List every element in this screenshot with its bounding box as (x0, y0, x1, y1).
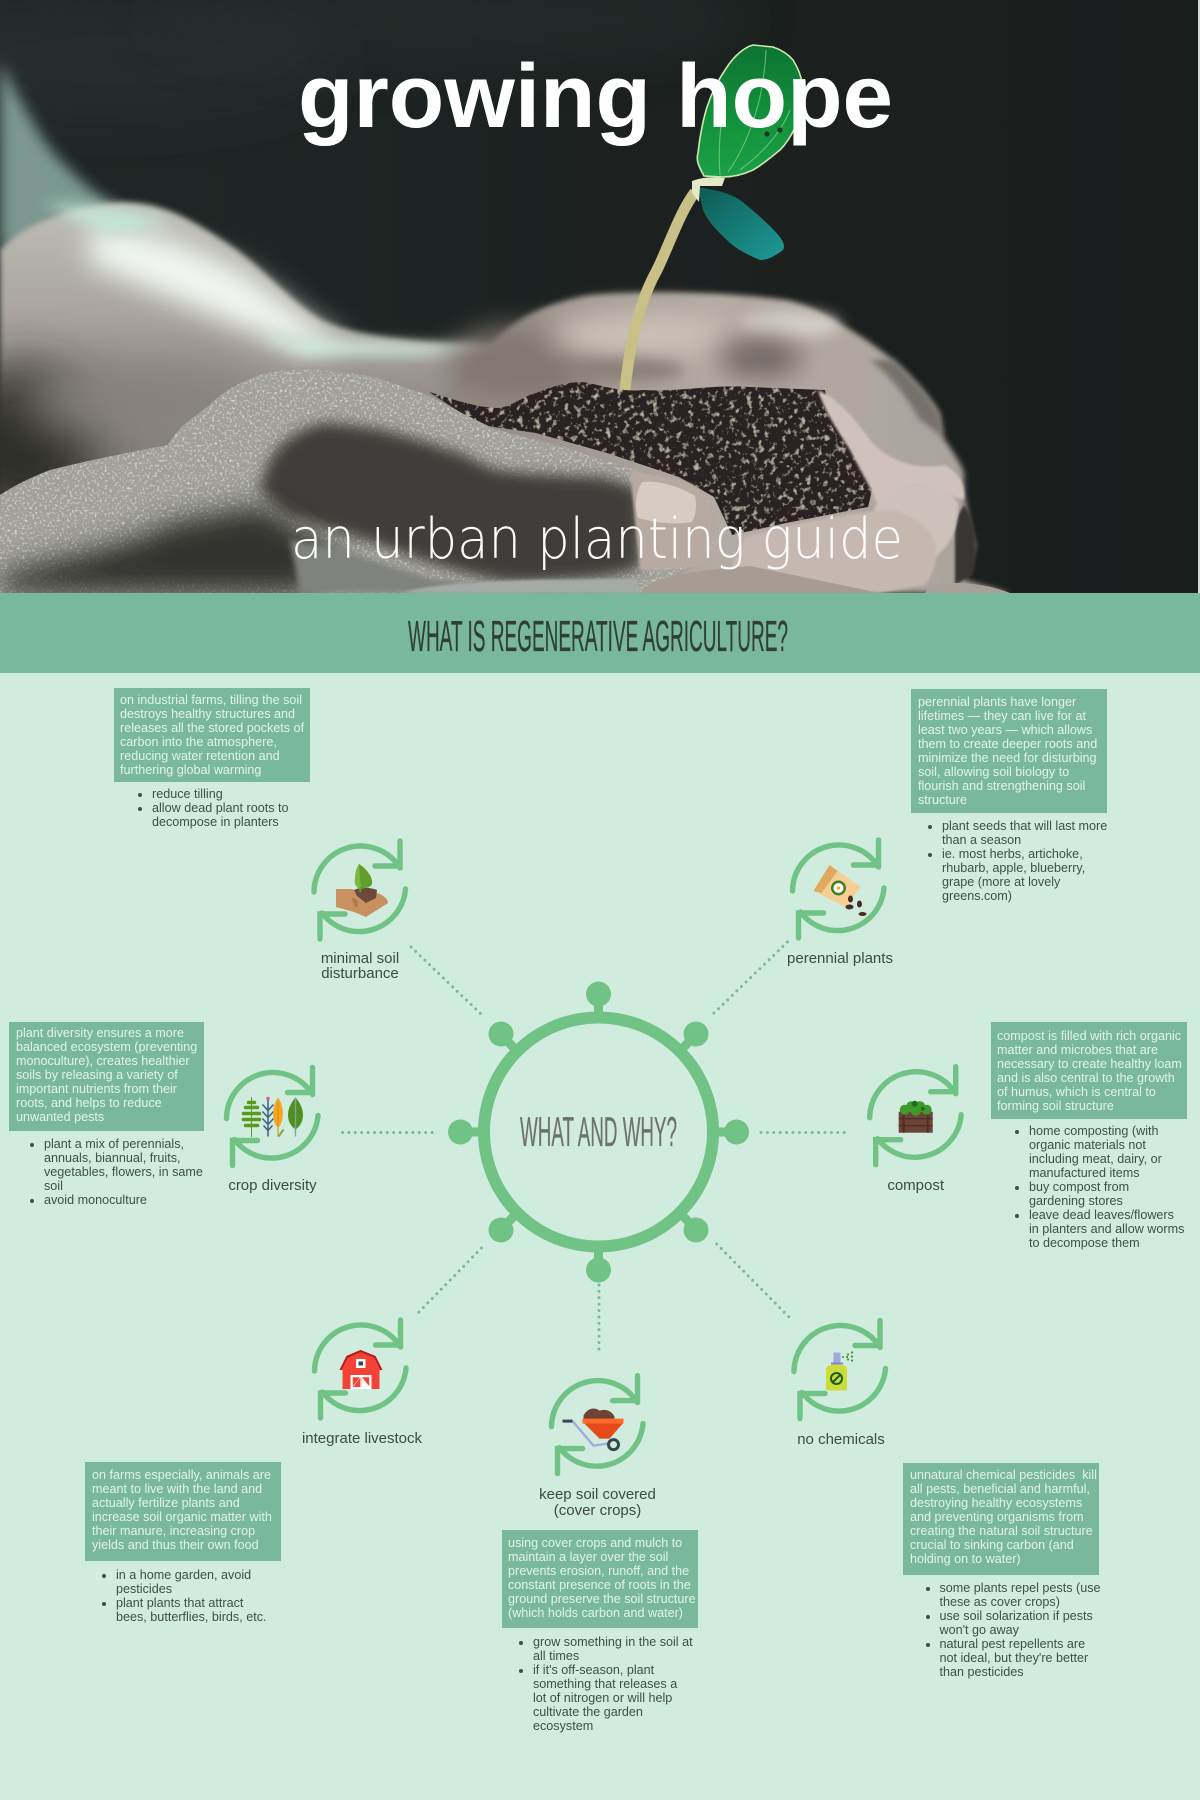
bullet list: if it's off-season, plant (533, 1663, 654, 1677)
callout (991, 1022, 1187, 1119)
bullet list: than pesticides (940, 1665, 1024, 1679)
callout: unnatural chemical pesticides kill (910, 1468, 1097, 1482)
callout: using cover crops and mulch to (508, 1536, 682, 1550)
bullet list: some plants repel pests (use (940, 1581, 1101, 1595)
callout: flourish and strengthening soil (918, 779, 1085, 793)
callout: unwanted pests (16, 1110, 104, 1124)
callout: destroys healthy structures and (120, 707, 295, 721)
bullet list: greens.com) (942, 889, 1012, 903)
callout: on industrial farms, tilling the soil (120, 693, 302, 707)
bullet list: including meat, dairy, or (1029, 1152, 1162, 1166)
callout: destroying healthy ecosystems (910, 1496, 1082, 1510)
bullet list: in planters and allow worms (1029, 1222, 1184, 1236)
node: compost (870, 1067, 961, 1194)
icon: hand holding plant (336, 864, 388, 917)
callout: matter and microbes that are (997, 1043, 1158, 1057)
callout: constant presence of roots in the (508, 1578, 691, 1592)
bullet list: grape (more at lovely (942, 875, 1060, 889)
bullet list: ie. most herbs, artichoke, (942, 847, 1083, 861)
title: growing hope (298, 47, 893, 147)
callout: of humus, which is central to (997, 1085, 1156, 1099)
bullet list: soil (44, 1179, 63, 1193)
callout: them to create deeper roots and (918, 737, 1097, 751)
dotted connectors (342, 942, 847, 1354)
panel: minimal soil disturbance text (114, 688, 310, 829)
panel: crop diversity text (9, 1022, 204, 1207)
callout: and preventing organisms from (910, 1510, 1084, 1524)
callout: holding on to water) (910, 1552, 1021, 1566)
callout (903, 1463, 1099, 1575)
label: perennial plants (787, 950, 893, 967)
callout: minimize the need for disturbing (918, 751, 1097, 765)
bullet list: lot of nitrogen or will help (533, 1691, 672, 1705)
icon: wheelbarrow (562, 1409, 624, 1450)
bullet list: vegetables, flowers, in same (44, 1165, 203, 1179)
bullet list: annuals, biannual, fruits, (44, 1151, 181, 1165)
callout: plant diversity ensures a more (16, 1026, 184, 1040)
node: keep soil covered (539, 1376, 656, 1519)
callout: important nutrients from their (16, 1082, 177, 1096)
callout: soil, allowing soil biology to (918, 765, 1069, 779)
callout: roots, and helps to reduce (16, 1096, 162, 1110)
label: no chemicals (797, 1431, 885, 1448)
callout (911, 689, 1107, 813)
icon: seed packet (814, 865, 866, 916)
bullet list: these as cover crops) (940, 1595, 1060, 1609)
callout (502, 1530, 698, 1628)
icon: red barn (340, 1350, 382, 1389)
bullet list (926, 1581, 1101, 1679)
bullet list: than a season (942, 833, 1021, 847)
callout: prevents erosion, runoff, and the (508, 1564, 689, 1578)
label: minimal soil (321, 950, 399, 967)
panel: keep soil covered text (502, 1530, 698, 1733)
hero photo: hands holding seedling (0, 0, 1200, 593)
callout: releases all the stored pockets of (120, 721, 304, 735)
bullet list: all times (533, 1649, 579, 1663)
bullet list (138, 787, 289, 829)
bullet list: plant plants that attract (116, 1596, 243, 1610)
callout: actually fertilize plants and (92, 1496, 240, 1510)
label: (cover crops) (554, 1502, 641, 1519)
callout: their manure, increasing crop (92, 1524, 255, 1538)
callout: soils by releasing a variety of (16, 1068, 178, 1082)
callout: lifetimes — they can live for at (918, 709, 1086, 723)
label: compost (887, 1177, 945, 1194)
callout: increase soil organic matter with (92, 1510, 272, 1524)
hub: what and why circle: WHAT AND WHY? (520, 1108, 677, 1155)
callout: yields and thus their own food (92, 1538, 259, 1552)
edge strip (1198, 0, 1200, 593)
bullet list (1015, 1124, 1184, 1250)
bullet list: to decompose them (1029, 1236, 1140, 1250)
bullet list: reduce tilling (152, 787, 223, 801)
callout: compost is filled with rich organic (997, 1029, 1181, 1043)
bullet list: buy compost from (1029, 1180, 1129, 1194)
node: crop diversity (226, 1068, 318, 1194)
callout: crucial to sinking carbon (and (910, 1538, 1074, 1552)
bullet list: use soil solarization if pests (940, 1609, 1093, 1623)
bullet list: leave dead leaves/flowers (1029, 1208, 1174, 1222)
callout (114, 688, 310, 782)
bullet list (102, 1568, 266, 1624)
subtitle: an urban planting guide (291, 507, 903, 572)
callout: and is also central to the growth (997, 1071, 1175, 1085)
callout: structure (918, 793, 967, 807)
heading band (0, 593, 1200, 673)
bullet list: something that releases a (533, 1677, 677, 1691)
node: integrate livestock (302, 1320, 423, 1447)
bullet list: natural pest repellents are (940, 1637, 1085, 1651)
bullet list: plant a mix of perennials, (44, 1137, 184, 1151)
callout: monoculture), creates healthier (16, 1054, 190, 1068)
bullet list: in a home garden, avoid (116, 1568, 251, 1582)
bullet list: allow dead plant roots to (152, 801, 289, 815)
node: no chemicals (794, 1320, 886, 1448)
callout: maintain a layer over the soil (508, 1550, 668, 1564)
bullet list: cultivate the garden (533, 1705, 643, 1719)
bullet list: pesticides (116, 1582, 172, 1596)
node: perennial plants (787, 840, 893, 967)
label: integrate livestock (302, 1430, 423, 1447)
callout: meant to live with the land and (92, 1482, 262, 1496)
bullet list: not ideal, but they're better (940, 1651, 1088, 1665)
bullet list (30, 1137, 203, 1207)
bullet list: home composting (with (1029, 1124, 1158, 1138)
label: disturbance (321, 965, 399, 982)
callout (9, 1022, 204, 1131)
callout: carbon into the atmosphere, (120, 735, 277, 749)
icon: four plants (244, 1097, 303, 1136)
node: minimal soil disturbance (314, 841, 406, 982)
panel: integrate livestock text (85, 1462, 281, 1624)
callout: all pests, beneficial and harmful, (910, 1482, 1090, 1496)
callout: ground preserve the soil structure (508, 1592, 696, 1606)
callout: balanced ecosystem (preventing (16, 1040, 197, 1054)
bullet list: rhubarb, apple, blueberry, (942, 861, 1085, 875)
bullet list: ecosystem (533, 1719, 593, 1733)
callout: forming soil structure (997, 1099, 1114, 1113)
callout: (which holds carbon and water) (508, 1606, 683, 1620)
bullet list: won't go away (940, 1623, 1019, 1637)
bullet list: bees, butterflies, birds, etc. (116, 1610, 266, 1624)
label: keep soil covered (539, 1486, 656, 1503)
bullet list: gardening stores (1029, 1194, 1123, 1208)
callout: furthering global warming (120, 763, 261, 777)
callout: perennial plants have longer (918, 695, 1076, 709)
label: crop diversity (228, 1177, 317, 1194)
callout: least two years — which allows (918, 723, 1092, 737)
callout: reducing water retention and (120, 749, 280, 763)
bullet list: avoid monoculture (44, 1193, 147, 1207)
panel: no chemicals text (903, 1463, 1101, 1679)
callout: on farms especially, animals are (92, 1468, 271, 1482)
callout (85, 1462, 281, 1561)
bullet list (928, 819, 1107, 903)
callout: creating the natural soil structure (910, 1524, 1093, 1538)
bullet list: plant seeds that will last more (942, 819, 1107, 833)
hub: what and why circle (448, 982, 749, 1282)
icon: spray can (826, 1351, 853, 1390)
icon: compost crate (899, 1101, 933, 1133)
panel: compost text (991, 1022, 1187, 1250)
panel: perennial plants text (911, 689, 1107, 903)
bullet list: grow something in the soil at (533, 1635, 693, 1649)
bullet list: manufactured items (1029, 1166, 1140, 1180)
bullet list: decompose in planters (152, 815, 279, 829)
callout: necessary to create healthy loam (997, 1057, 1182, 1071)
bullet list (519, 1635, 693, 1733)
bullet list: organic materials not (1029, 1138, 1146, 1152)
